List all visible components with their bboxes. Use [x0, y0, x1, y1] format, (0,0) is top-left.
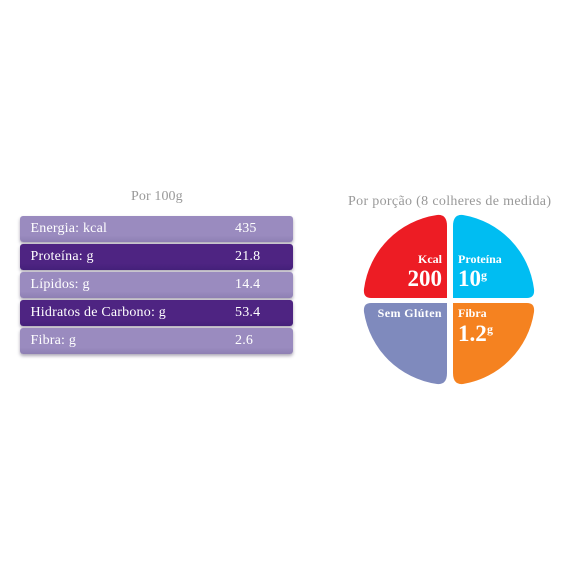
- segment: protein: g: [481, 268, 487, 282]
- segment: kcal: 200: [408, 266, 442, 291]
- row: lipids: [20, 272, 293, 298]
- segment: fibre: 1.2: [458, 321, 487, 346]
- row: protein: Proteína: g: [30, 249, 94, 264]
- row: carbohydrates: [20, 300, 293, 326]
- segment: fibre: Fibra: [458, 306, 487, 320]
- segment: gluten free: [364, 303, 447, 384]
- segment: fibre: [453, 303, 534, 384]
- row: fibre: [20, 328, 293, 354]
- row: lipids: 14.4: [235, 277, 260, 292]
- segment: protein: Proteína: [458, 252, 502, 266]
- row: energy: 435: [235, 221, 257, 236]
- segment: kcal: [364, 215, 447, 298]
- row: energy: Energia: kcal: [30, 221, 107, 236]
- segment: protein: 10: [458, 266, 481, 291]
- row: energy: [20, 216, 293, 242]
- row: protein: 21.8: [235, 249, 260, 264]
- row: carbohydrates: 53.4: [235, 305, 260, 320]
- row: fibre: 2.6: [235, 333, 253, 348]
- nutrition table: [18, 216, 295, 358]
- segment: protein: [453, 215, 534, 298]
- segment: gluten free: Sem Glúten: [378, 306, 442, 320]
- segment: kcal: Kcal: [418, 252, 443, 266]
- row: fibre: Fibra: g: [30, 333, 76, 348]
- row: protein: [20, 244, 293, 270]
- row: lipids: Lípidos: g: [30, 277, 90, 292]
- heading: per portion: Por porção (8 colheres de medida): [348, 194, 551, 209]
- segment: fibre: g: [487, 322, 493, 336]
- row: carbohydrates: Hidratos de Carbono: g: [30, 305, 166, 320]
- heading: per 100g: Por 100g: [131, 189, 183, 204]
